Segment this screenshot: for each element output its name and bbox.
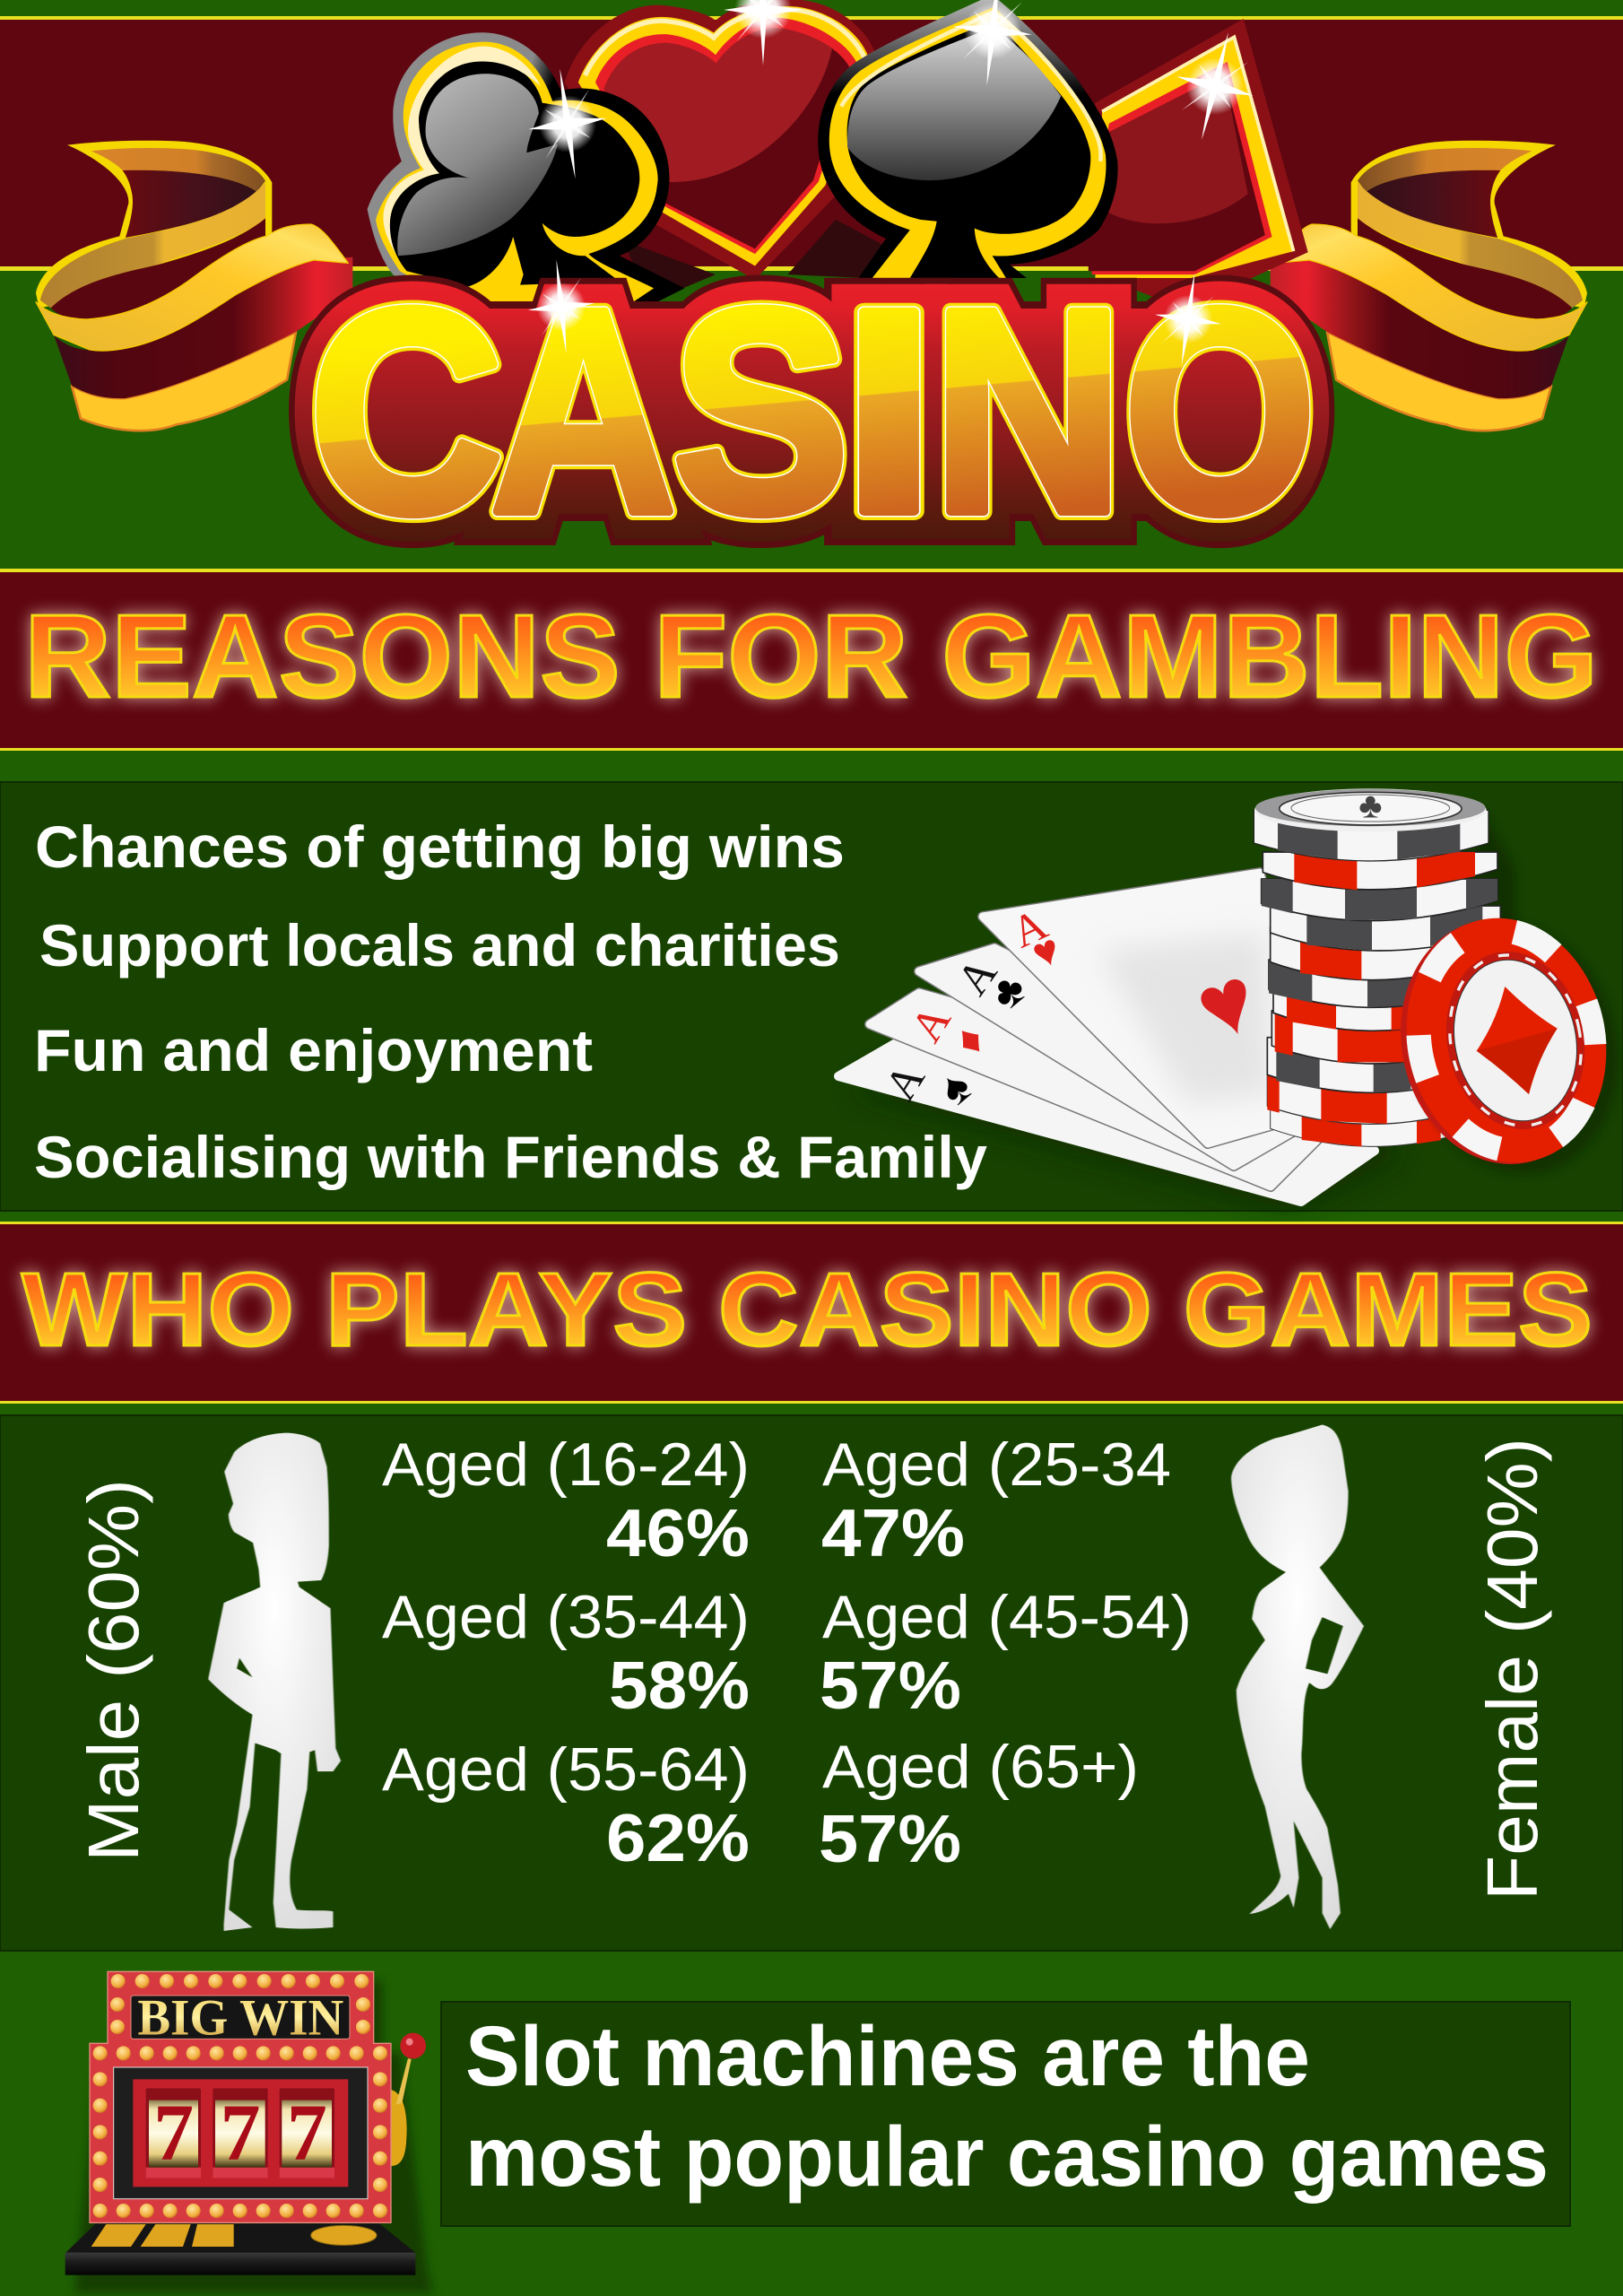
card: ace of spades: ♠ (929, 1060, 981, 1116)
icon: female silhouette (1231, 1424, 1364, 1929)
stat: aged 65+: Aged (65+) (822, 1733, 1139, 1801)
card: ace of clubs (919, 948, 1327, 1166)
label: female share: Female (40%) (1472, 1438, 1552, 1900)
title: CASINO: N (933, 250, 1124, 573)
stat: aged 65+ (819, 1733, 1139, 1876)
text: reason 3: Fun and enjoyment (34, 1017, 593, 1083)
base with buttons (65, 2223, 415, 2275)
lever (391, 2033, 426, 2166)
stat: aged 65+: 57% (819, 1801, 961, 1876)
card: ace of spades: A (874, 1055, 934, 1109)
divider line under logo (0, 569, 1623, 572)
icon: stack of poker chips (1254, 787, 1515, 1146)
stat: aged 16-24: Aged (16-24) (382, 1431, 750, 1499)
card: ace of clubs: A (947, 948, 1006, 1004)
chip 8 (1271, 1011, 1477, 1064)
section band: reasons for gambling (0, 572, 1623, 751)
title: CASINO: S (673, 250, 849, 573)
chip 6 (1269, 960, 1477, 1007)
reel window: 7 (153, 2088, 194, 2177)
icon: male silhouette (208, 1433, 341, 1931)
label: male share: Male (60%) (74, 1479, 153, 1862)
card: ace of spades (838, 1043, 1375, 1202)
icon: right ribbon (1271, 141, 1587, 430)
marquee bulbs (93, 1974, 387, 2218)
chip 5 (1271, 926, 1477, 980)
heading: who plays casino games: WHO PLAYS CASINO GAMES (22, 1251, 1593, 1368)
stat: aged 25-34: Aged (25-34 (822, 1431, 1171, 1499)
title: CASINO: O (1124, 250, 1316, 573)
stat: aged 35-44: Aged (35-44) (382, 1583, 750, 1651)
stat: aged 55-64 (382, 1735, 750, 1875)
panel: demographics (0, 1415, 1623, 1951)
stat: aged 45-54: Aged (45-54) (822, 1583, 1192, 1651)
card: ace of hearts: ♥ (1183, 945, 1271, 1062)
big win sign: BIG WIN (137, 1989, 343, 2046)
callout: slot machines text box (441, 2002, 1570, 2226)
wordmark plate (305, 250, 1318, 573)
logo: casino suits, ribbons and wordmark (36, 0, 1587, 573)
stat: aged 45-54 (820, 1583, 1192, 1723)
title: CASINO (309, 250, 1316, 573)
stat: aged 25-34: 47% (821, 1495, 965, 1570)
callout: slot machines text box: most popular casino games (465, 2109, 1549, 2205)
chip 11 (1271, 1100, 1477, 1146)
title: CASINO: C (309, 250, 503, 573)
top maroon band (0, 16, 1623, 271)
chip 9 (1267, 1038, 1477, 1092)
card: ace of diamonds: ♦ (944, 1013, 994, 1066)
stat: aged 16-24 (382, 1431, 750, 1570)
section band: who plays casino games (0, 1222, 1623, 1404)
card: ace of hearts (983, 873, 1318, 1144)
cabinet frame (90, 1971, 391, 2222)
heading: reasons for gambling: REASONS FOR GAMBLING (24, 590, 1598, 722)
stat: aged 45-54: 57% (820, 1648, 961, 1723)
stat: aged 16-24: 46% (606, 1495, 750, 1570)
sparkles (513, 0, 1274, 371)
text: reason 4: Socialising with Friends & Family (34, 1124, 987, 1190)
icon: four aces playing cards (838, 873, 1399, 1211)
icon: spade suit (818, 0, 1118, 278)
title: CASINO: A (490, 250, 676, 573)
callout: slot machines text box: Slot machines are the (465, 2009, 1310, 2104)
icon: diamond suit (1089, 19, 1308, 309)
chip 10 (1267, 1067, 1477, 1124)
text: reason 1: Chances of getting big wins (35, 813, 845, 880)
reel window: 7 (287, 2088, 327, 2177)
chip 7 (1273, 987, 1477, 1031)
stat: aged 35-44 (382, 1583, 750, 1723)
stat: aged 35-44: 58% (609, 1648, 750, 1723)
chip 1 with top face (1254, 787, 1488, 861)
card: ace of diamonds (870, 993, 1345, 1187)
panel: reasons list with cards and chips (0, 782, 1623, 1211)
reel window (114, 2067, 368, 2199)
card: ace of hearts: ♥ (1026, 926, 1066, 978)
chip 1 with top face: ♣ (1358, 787, 1382, 826)
card: ace of clubs: ♣ (981, 962, 1036, 1020)
card: ace of diamonds: A (900, 996, 960, 1050)
icon: heart suit (565, 0, 894, 302)
stat: aged 55-64: Aged (55-64) (382, 1735, 750, 1804)
icon: large red diamond chip (1378, 900, 1623, 1193)
reel window: 7 (220, 2088, 260, 2177)
chip 4 (1271, 906, 1500, 951)
stat: aged 25-34 (821, 1431, 1171, 1570)
icon: left ribbon (36, 141, 352, 430)
title: CASINO: I (841, 250, 936, 573)
card: ace of hearts: A (1004, 899, 1055, 958)
text: reason 2: Support locals and charities (39, 912, 840, 978)
stat: aged 55-64: 62% (606, 1800, 750, 1875)
chip 3 (1262, 879, 1497, 921)
chip 2 (1263, 852, 1497, 890)
icon: club suit (368, 32, 685, 344)
icon: slot machine (65, 1971, 433, 2293)
